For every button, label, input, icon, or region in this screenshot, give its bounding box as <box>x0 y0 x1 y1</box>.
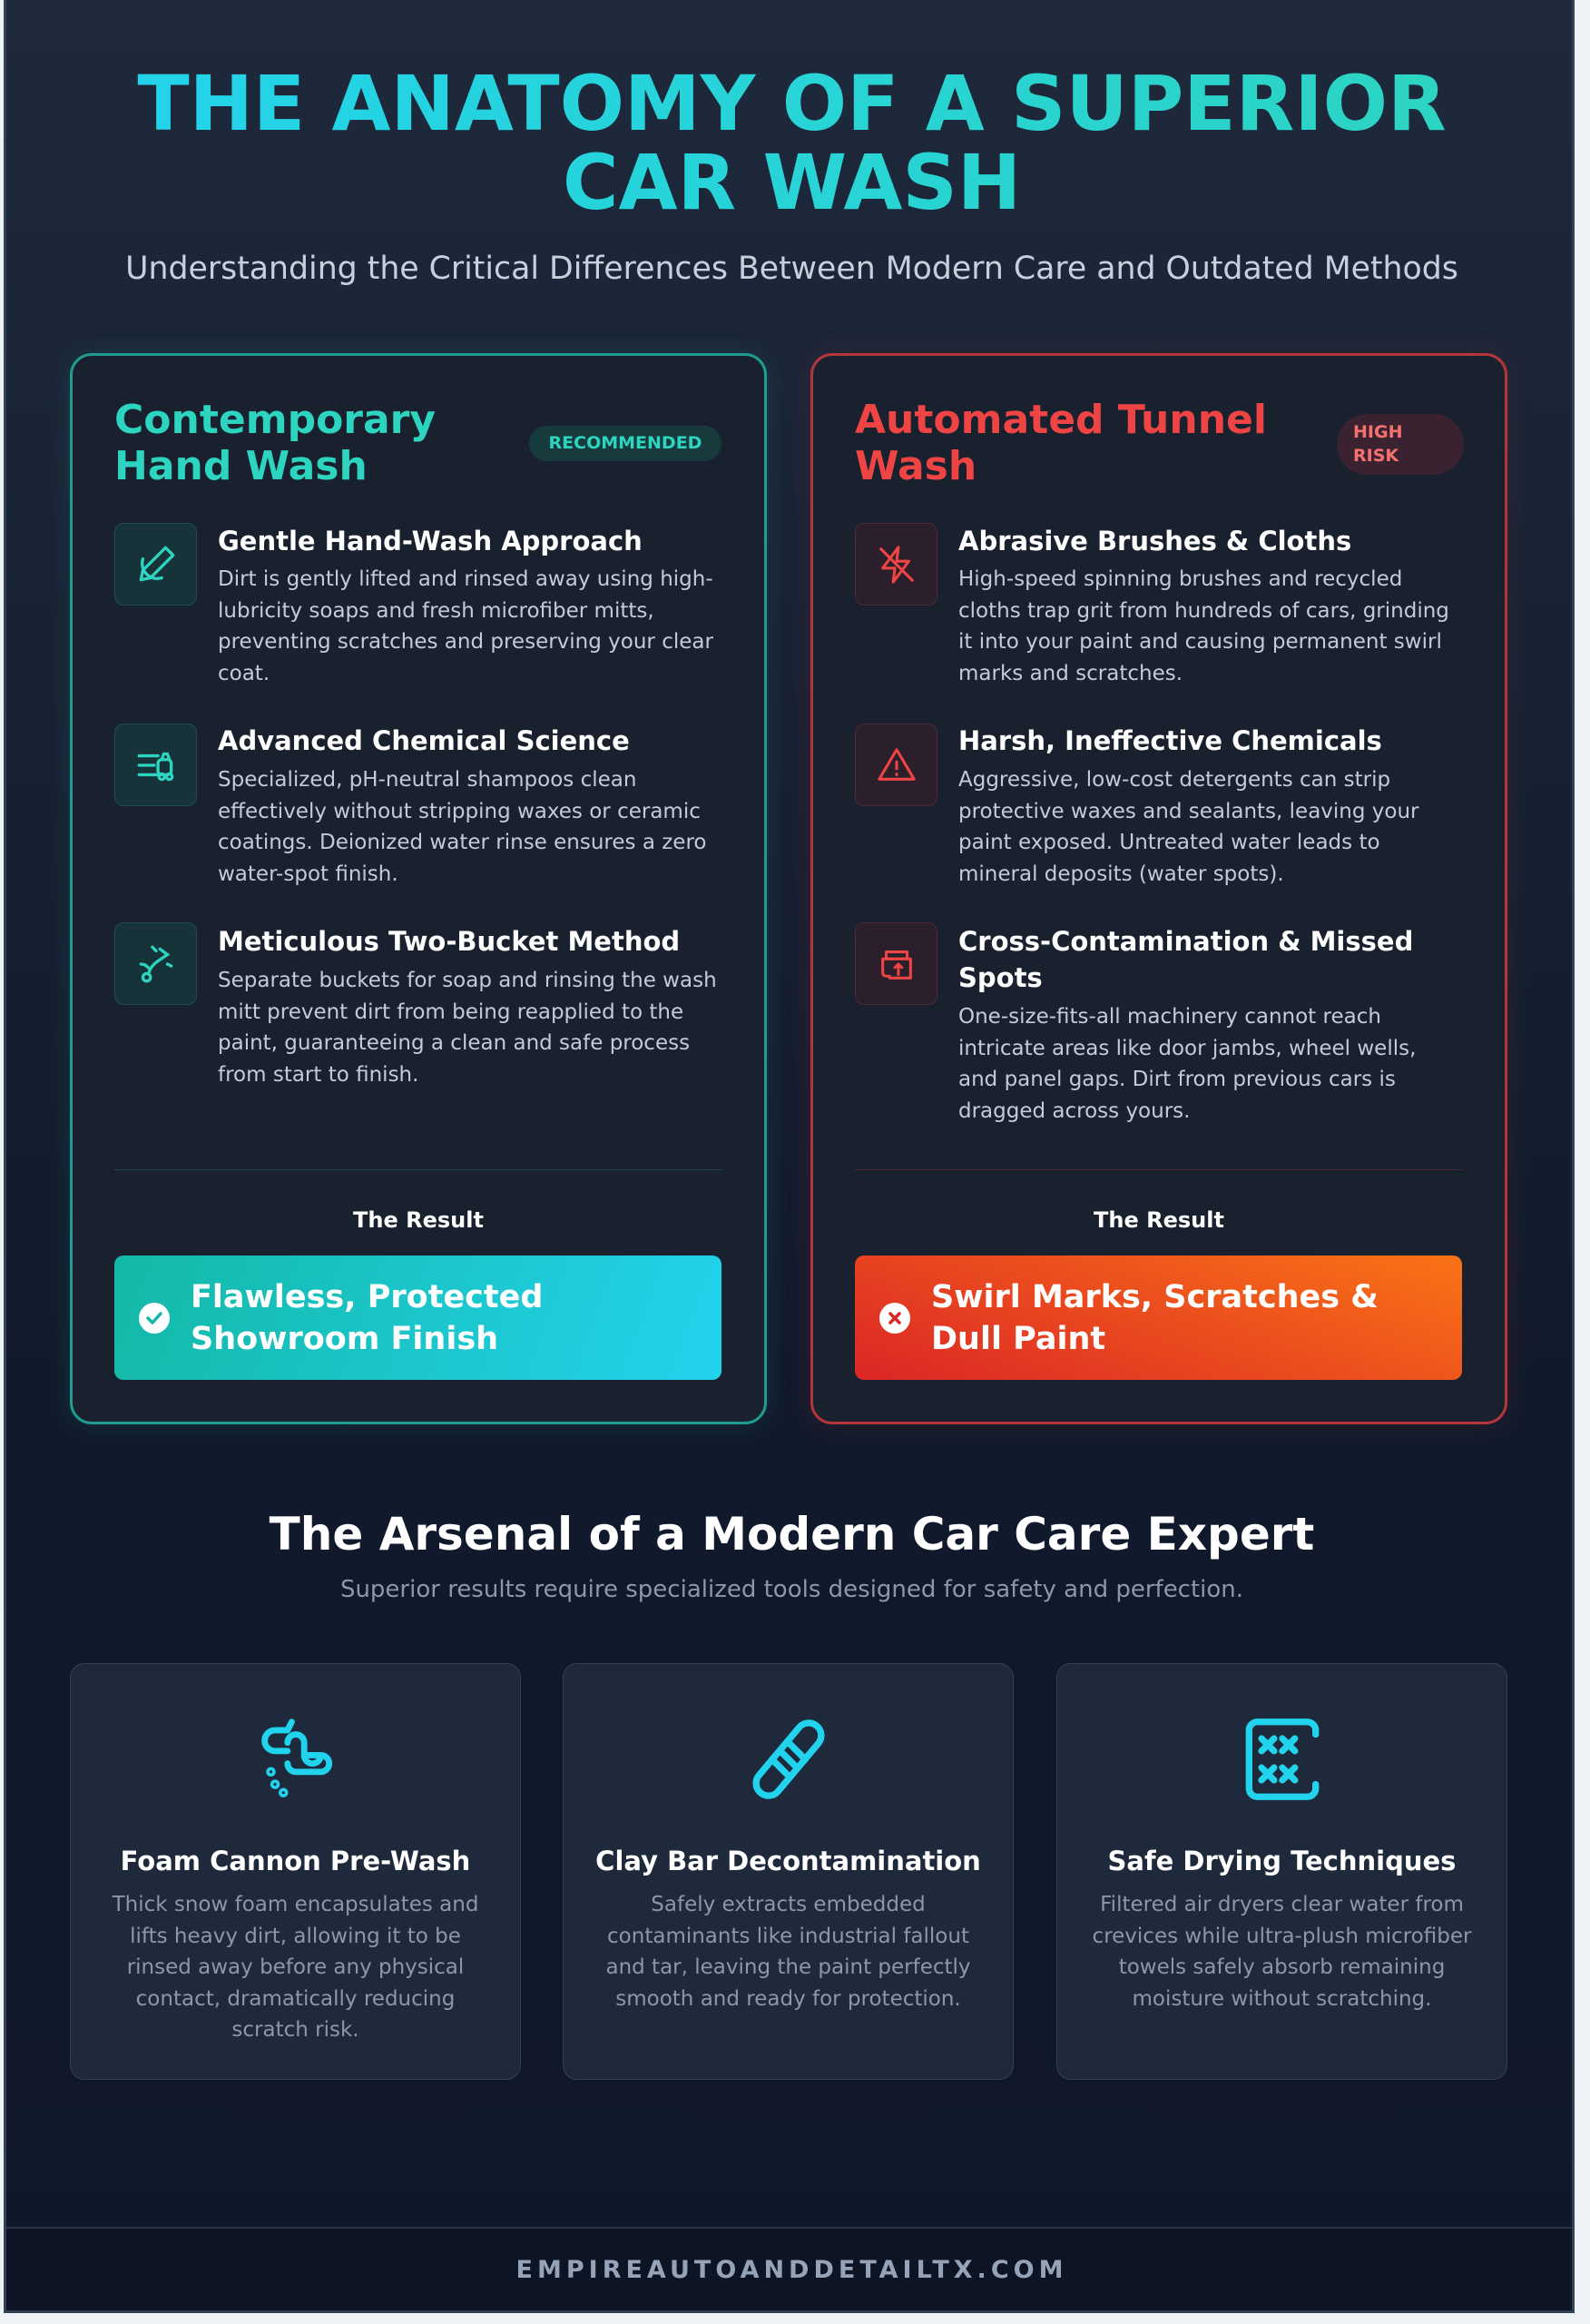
desc: harsh chemicals: Aggressive, low-cost detergents can strip <box>958 768 1390 792</box>
title: CAR WASH <box>563 138 1021 227</box>
icon: check <box>139 1303 170 1334</box>
card: safe drying <box>1056 1663 1507 2080</box>
card: foam cannon <box>70 1663 521 2080</box>
desc: harsh chemicals <box>958 768 1419 886</box>
item: gentle hand-wash: Gentle Hand-Wash Approach <box>218 526 643 556</box>
panel heading <box>114 397 436 489</box>
desc: gentle hand-wash: lubricity soaps and fresh microfiber mitts, <box>218 599 654 623</box>
desc: abrasive brushes: cloths trap grit from hundreds of cars, grinding <box>958 599 1449 623</box>
desc: harsh chemicals: paint exposed. Untreated water leads to <box>958 831 1380 854</box>
desc: gentle hand-wash: preventing scratches and preserving your clear <box>218 630 713 654</box>
desc: harsh chemicals: protective waxes and sealants, leaving your <box>958 799 1419 822</box>
result box: swirl marks: Dull Paint <box>931 1320 1105 1356</box>
icon: clay bar <box>753 1719 824 1799</box>
desc: abrasive brushes: High-speed spinning brushes and recycled <box>958 567 1402 591</box>
desc: chemical science: effectively without stripping waxes or ceramic <box>218 799 701 822</box>
card description: lifts heavy dirt, allowing it to be <box>130 1925 461 1948</box>
desc: two-bucket method: paint, guaranteeing a clean and safe process <box>218 1031 690 1055</box>
desc: gentle hand-wash: Dirt is gently lifted and rinsed away using high- <box>218 567 713 591</box>
desc: chemical science: Specialized, pH-neutral shampoos clean <box>218 768 636 792</box>
desc: chemical science: water-spot finish. <box>218 862 398 886</box>
badge: recommended: RECOMMENDED <box>549 433 702 453</box>
title <box>6 64 1577 222</box>
card title: Foam Cannon Pre-Wash <box>121 1846 470 1876</box>
icon: two-bucket <box>114 922 197 1005</box>
card description: crevices while ultra-plush microfiber <box>1093 1925 1471 1948</box>
panel heading: Wash <box>855 443 977 489</box>
card description <box>605 1893 971 2010</box>
panel: contemporary hand wash <box>70 353 767 1424</box>
panel heading: Hand Wash <box>114 443 368 489</box>
card description: scratch risk. <box>231 2018 359 2042</box>
item: cross-contamination: Spots <box>958 962 1043 993</box>
panel heading: Automated Tunnel <box>855 397 1267 443</box>
badge: recommended <box>529 426 721 461</box>
card title: Clay Bar Decontamination <box>595 1846 981 1876</box>
card title: Safe Drying Techniques <box>1108 1846 1456 1876</box>
item: chemical science: Advanced Chemical Science <box>218 725 630 756</box>
item: two-bucket method: Meticulous Two-Bucket Method <box>218 926 680 957</box>
item: abrasive brushes: Abrasive Brushes & Cloths <box>958 526 1351 556</box>
item: cross-contamination: Cross-Contamination & Missed <box>958 926 1413 957</box>
card description <box>113 1893 478 2042</box>
desc: two-bucket method: Separate buckets for soap and rinsing the wash <box>218 969 717 992</box>
desc: abrasive brushes: it into your paint and causing permanent swirl <box>958 630 1442 654</box>
card description: contaminants like industrial fallout <box>607 1925 969 1948</box>
panel: automated tunnel wash <box>810 353 1507 1424</box>
result label: The Result <box>1094 1207 1224 1233</box>
icon: foam cannon <box>261 1718 332 1797</box>
desc: cross-contamination <box>958 1005 1416 1122</box>
desc: cross-contamination: One-size-fits-all machinery cannot reach <box>958 1005 1381 1029</box>
card description: Thick snow foam encapsulates and <box>113 1893 478 1916</box>
card description: rinsed away before any physical <box>127 1955 464 1979</box>
icon: drying towel <box>1245 1718 1320 1800</box>
icon: contamination <box>855 922 937 1005</box>
section subtitle: Superior results require specialized tools designed for safety and perfection. <box>340 1576 1243 1603</box>
item: cross-contamination <box>958 926 1413 993</box>
result box: flawless: Showroom Finish <box>191 1320 498 1356</box>
subtitle: Understanding the Critical Differences Between Modern Care and Outdated Methods <box>125 251 1458 287</box>
result label: The Result <box>353 1207 484 1233</box>
icon: hand wash <box>114 523 197 606</box>
icon: warning <box>855 724 937 806</box>
desc: two-bucket method: mitt prevent dirt from being reapplied to the <box>218 1000 683 1024</box>
icon: x <box>879 1303 910 1334</box>
desc: gentle hand-wash <box>218 567 713 684</box>
card description: towels safely absorb remaining <box>1119 1955 1445 1979</box>
desc: chemical science: coatings. Deionized water rinse ensures a zero <box>218 831 706 854</box>
desc: chemical science <box>218 768 706 886</box>
desc: cross-contamination: dragged across yours. <box>958 1098 1190 1122</box>
card description: and tar, leaving the paint perfectly <box>605 1955 971 1979</box>
card description: contact, dramatically reducing <box>136 1986 455 2010</box>
card: clay bar <box>563 1663 1014 2080</box>
result box: flawless <box>114 1256 721 1380</box>
item: harsh chemicals: Harsh, Ineffective Chemicals <box>958 725 1382 756</box>
result box: flawless: Flawless, Protected <box>191 1278 543 1315</box>
badge: high risk: HIGH <box>1353 422 1402 442</box>
card description: Filtered air dryers clear water from <box>1100 1893 1464 1916</box>
result box: swirl marks <box>855 1256 1462 1380</box>
card description <box>1093 1893 1472 2010</box>
panel heading <box>855 397 1267 489</box>
desc: abrasive brushes <box>958 567 1449 684</box>
icon: brushes <box>855 523 937 606</box>
section heading: arsenal: The Arsenal of a Modern Car Care Expert <box>270 1508 1314 1561</box>
desc: gentle hand-wash: coat. <box>218 661 270 684</box>
card description: Safely extracts embedded <box>651 1893 926 1916</box>
icon: chemical <box>114 724 197 806</box>
desc: cross-contamination: intricate areas like door jambs, wheel wells, <box>958 1037 1416 1060</box>
desc: cross-contamination: and panel gaps. Dirt from previous cars is <box>958 1068 1396 1091</box>
badge: high risk <box>1337 414 1464 475</box>
footer url: EMPIREAUTOANDDETAILTX.COM <box>516 2256 1067 2284</box>
result box: swirl marks: Swirl Marks, Scratches & <box>931 1278 1379 1315</box>
panel heading: Contemporary <box>114 397 436 443</box>
title: THE ANATOMY OF A SUPERIOR <box>137 59 1447 148</box>
desc: two-bucket method <box>218 969 717 1086</box>
desc: harsh chemicals: mineral deposits (water spots). <box>958 862 1284 886</box>
footer <box>6 2227 1577 2313</box>
card description: smooth and ready for protection. <box>615 1986 961 2010</box>
card description: moisture without scratching. <box>1133 1986 1431 2010</box>
badge: high risk: RISK <box>1353 446 1399 466</box>
desc: abrasive brushes: marks and scratches. <box>958 661 1183 684</box>
desc: two-bucket method: from start to finish. <box>218 1062 418 1086</box>
